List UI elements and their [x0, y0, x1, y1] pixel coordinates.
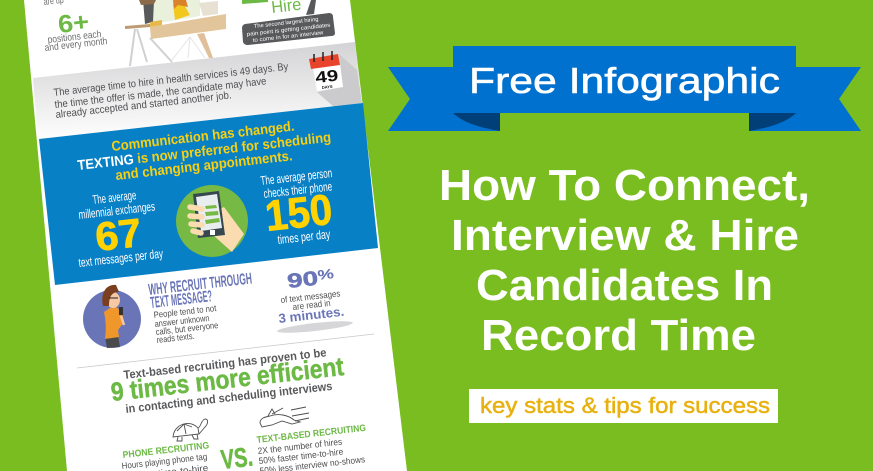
column: text-based recruiting: 2X the number of hires — [257, 437, 343, 456]
stat: 90 percent in 3 minutes — [277, 266, 353, 335]
subtitle tag: key stats & tips for success — [480, 393, 770, 418]
stat: 150 phone checks: checks their phone — [263, 179, 333, 201]
title: Interview & Hire — [451, 211, 799, 260]
column: phone recruiting: Hours playing phone tag — [121, 451, 208, 471]
column: text-based recruiting — [256, 423, 367, 471]
heading: 9 times more efficient: Text-based recruiting has proven to be — [123, 345, 327, 382]
stat: 67 text messages: millennial exchanges — [78, 199, 156, 222]
grey band: time to hire: the time the offer is made, the candidate may have — [54, 75, 267, 111]
column: phone recruiting: PHONE RECRUITING — [122, 440, 210, 461]
heading: communication has changed: Communication has changed. — [111, 118, 295, 154]
text: why recruit through text message: TEXT MESSAGE? — [150, 288, 213, 312]
stat: 90 percent in 3 minutes: % — [317, 266, 335, 283]
title: Candidates In — [476, 261, 773, 310]
hire callout: The second largest hiring — [254, 17, 319, 30]
heading: communication has changed: and changing appointments. — [115, 147, 293, 183]
icon: calendar 49 days: 49 — [315, 68, 339, 87]
stat: 67 text messages: 67 — [93, 211, 144, 260]
hire callout — [242, 0, 335, 45]
icon: turtle — [173, 419, 208, 441]
column: text-based recruiting: TEXT-BASED RECRUITING — [256, 423, 367, 446]
title: How To Connect, — [439, 161, 810, 210]
stat: 67 text messages — [78, 188, 164, 270]
icon: woman with phone — [83, 285, 141, 348]
panel: texting blue band — [39, 103, 378, 285]
heading: communication has changed: TEXTING is now preferred for scheduling — [77, 129, 332, 173]
text: why recruit through text message: People tend to not — [153, 303, 217, 320]
stat: 90 percent in 3 minutes: are read in — [292, 298, 331, 312]
stat: 150 phone checks: 150 — [263, 186, 335, 241]
title — [439, 161, 810, 360]
stat: 150 phone checks — [260, 166, 335, 247]
stat: 90 percent in 3 minutes: 3 minutes. — [278, 304, 345, 326]
heading: 9 times more efficient: 9 times more efficient — [109, 351, 346, 407]
icon: calendar 49 days: DAYS — [322, 84, 333, 90]
illustration: people at a desk — [125, 0, 226, 66]
top stat: 6+ positions — [43, 0, 108, 54]
hire callout: pain point is getting candidates — [247, 23, 331, 38]
stat: 150 phone checks: times per day — [277, 227, 332, 247]
grey band: time to hire: The average time to hire in health services is 49 days. By — [53, 61, 290, 99]
top stat: 6+ positions: 6+ — [57, 8, 90, 39]
top stat: 6+ positions: positions each — [47, 29, 102, 46]
hire callout: to come in for an interview — [253, 30, 325, 44]
text: why recruit through text message: answer unknown — [154, 313, 210, 329]
icon: rabbit — [260, 407, 309, 427]
column: phone recruiting — [121, 440, 210, 471]
stat: 67 text messages: text messages per day — [78, 247, 164, 270]
heading: 9 times more efficient: in contacting and scheduling interviews — [125, 379, 333, 416]
stat: 150 phone checks: The average person — [260, 166, 333, 188]
text: why recruit through text message: WHY RECRUIT THROUGH — [148, 270, 253, 299]
text: why recruit through text message: reads texts. — [156, 331, 195, 345]
stat: 90 percent in 3 minutes: 90 — [286, 269, 311, 293]
heading: communication has changed — [77, 118, 332, 183]
banner text: Free Infographic — [469, 60, 780, 101]
column: text-based recruiting: 50% faster time-to-hire — [258, 447, 344, 466]
subtitle tag — [469, 389, 778, 423]
text: why recruit through text message — [148, 270, 253, 345]
top stat: 6+ positions: and every month — [44, 36, 108, 54]
grey band: time to hire: already accepted and started another job. — [55, 89, 232, 121]
ribbon banner — [388, 46, 861, 131]
icon: calendar 49 days — [309, 51, 362, 107]
stat: 90 percent in 3 minutes: of text messages — [280, 288, 341, 305]
icon: hand holding phone — [176, 185, 248, 257]
stat: 67 text messages: The average — [92, 188, 137, 207]
grey band: time to hire — [33, 42, 362, 139]
text: why recruit through text message: calls, but everyone — [155, 320, 219, 337]
infographic page — [24, 0, 407, 471]
title: Record Time — [481, 311, 756, 360]
